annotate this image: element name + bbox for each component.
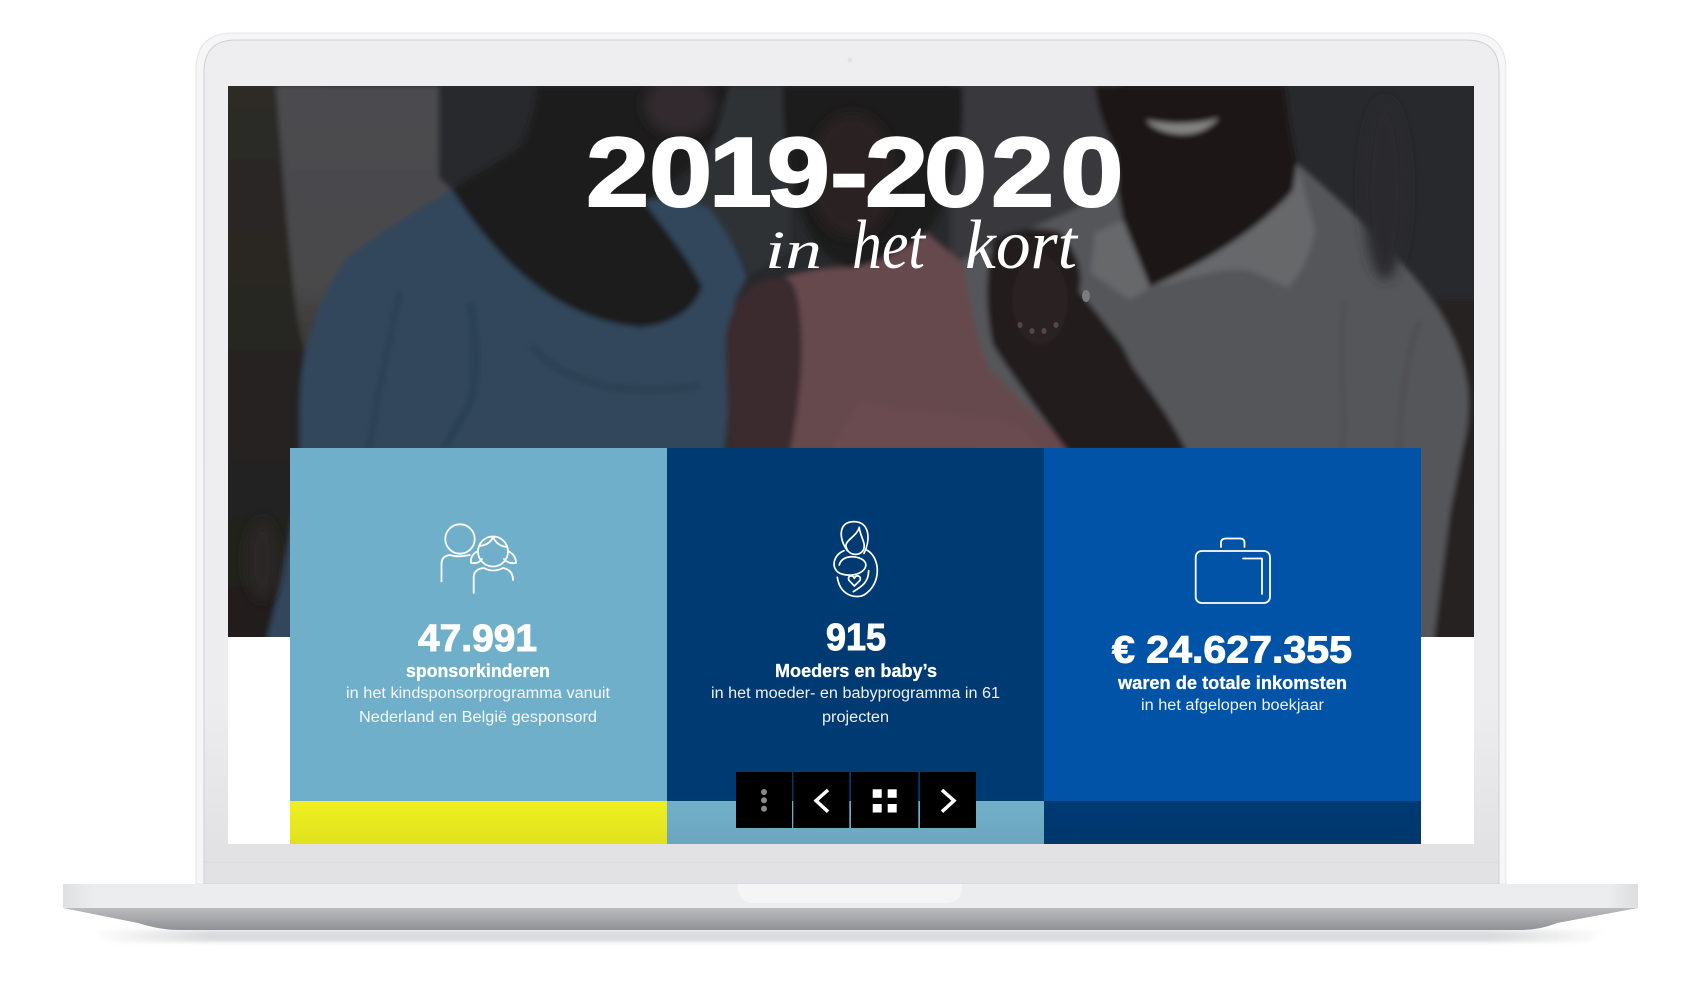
description: in het moeder- en babyprogramma in 61 bbox=[711, 685, 1000, 702]
child pink dress bbox=[783, 233, 1075, 452]
underside bbox=[63, 908, 1638, 930]
yellow bar bbox=[290, 801, 667, 844]
panel: moeders en baby's bbox=[667, 448, 1044, 844]
man's hand and arm bbox=[987, 229, 1187, 452]
hero photo: family, darkened bbox=[220, 75, 1480, 650]
light blue bar bbox=[667, 801, 1044, 844]
right background bbox=[1300, 300, 1480, 645]
laptop shadow bbox=[90, 930, 1610, 942]
child head bbox=[783, 86, 963, 268]
screen bbox=[220, 75, 1480, 844]
next button bbox=[920, 772, 976, 828]
stat: 915: 915 bbox=[826, 617, 886, 659]
space between woman and child bbox=[690, 86, 790, 275]
navy bar bbox=[1044, 801, 1421, 844]
laptop lid bbox=[196, 33, 1506, 884]
woman blue dress bbox=[265, 190, 747, 645]
laptop base bbox=[63, 884, 1638, 930]
description: in het kindsponsorprogramma vanuit bbox=[346, 685, 611, 702]
label: sponsorkinderen: sponsorkinderen bbox=[406, 661, 550, 681]
teeth bbox=[1146, 118, 1219, 134]
stat: total income: € 24.627.355 bbox=[1112, 630, 1352, 672]
label: Moeders en baby's: Moeders en baby’s bbox=[775, 661, 937, 681]
script subtitle: het bbox=[852, 207, 926, 284]
top deck bbox=[63, 884, 1638, 908]
man's shirt bbox=[960, 163, 1468, 645]
description bbox=[711, 685, 1000, 726]
title: 2019-2020 bbox=[586, 118, 1123, 227]
navigation controls bbox=[736, 772, 976, 828]
man's face and neck bbox=[1095, 86, 1297, 287]
collar bbox=[1154, 164, 1315, 287]
description bbox=[346, 685, 611, 726]
stat: 47.991: 47.991 bbox=[418, 618, 537, 660]
panel: sponsorkinderen bbox=[290, 448, 667, 844]
menu button bbox=[736, 772, 792, 828]
trackpad notch bbox=[738, 884, 962, 903]
wall right of child bbox=[948, 86, 1122, 262]
icon: briefcase bbox=[1196, 538, 1270, 603]
child arm bbox=[725, 278, 808, 452]
label: totale inkomsten: waren de totale inkomsten bbox=[1117, 673, 1347, 693]
woman head and chest bbox=[452, 86, 729, 327]
icon: adult and child bbox=[442, 524, 516, 593]
script subtitle: kort bbox=[965, 207, 1079, 284]
left background bbox=[228, 232, 302, 637]
panel: inkomsten bbox=[1044, 448, 1421, 844]
description: projecten bbox=[822, 709, 889, 726]
previous button bbox=[793, 772, 849, 828]
grid button bbox=[851, 772, 918, 828]
photo highlights bbox=[246, 75, 1407, 600]
fingernails and ring bbox=[1018, 290, 1090, 334]
icon: mother and baby bbox=[834, 522, 877, 597]
description: Nederland en België gesponsord bbox=[359, 709, 597, 726]
script subtitle: in bbox=[765, 220, 822, 280]
script subtitle bbox=[765, 207, 1079, 284]
description: in het afgelopen boekjaar bbox=[1141, 697, 1324, 714]
